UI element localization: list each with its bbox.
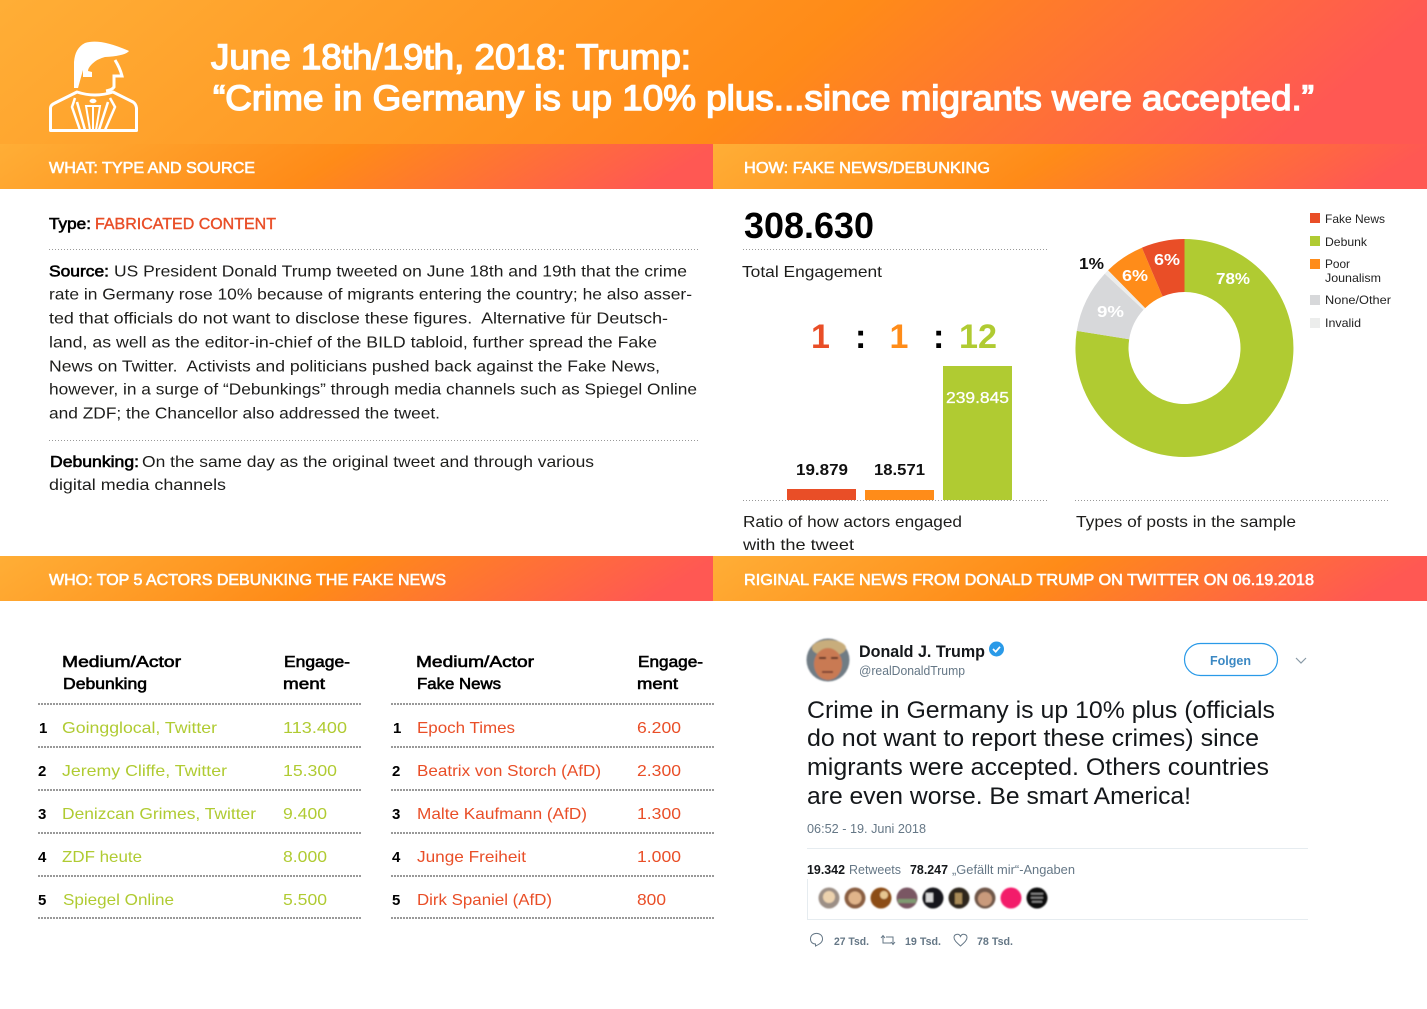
row 1 <box>393 720 681 737</box>
row 4: Junge Freiheit <box>417 849 527 866</box>
ratio numbers: 1 <box>890 318 908 356</box>
account handle: @realDonaldTrump <box>859 663 965 678</box>
row 4 <box>392 849 681 866</box>
donut chart: types of posts: 78% <box>1216 271 1250 288</box>
donut chart: types of posts: 9% <box>1097 304 1124 321</box>
row 4: 1.000 <box>637 849 681 866</box>
row 4: 8.000 <box>283 849 327 866</box>
tweet text: Crime in Germany is up 10% plus (officials <box>807 697 1275 724</box>
tweet stats: 78.247 <box>910 863 948 877</box>
section bar: how <box>713 144 1427 189</box>
panel: total engagement: 308.630 <box>744 205 874 246</box>
legend: Debunk <box>1325 235 1368 249</box>
bar chart: actor ratio: 19.879 <box>796 462 848 479</box>
row 4: 4 <box>392 849 401 866</box>
header banner <box>0 0 1427 144</box>
title <box>211 38 1314 118</box>
source paragraph: ted that officials do not want to disclose these figures. Alternative für Deutsch- <box>49 310 668 328</box>
row 5: 800 <box>637 892 666 909</box>
row 1: Epoch Times <box>417 720 515 737</box>
icon: heart <box>954 934 967 946</box>
account name: Donald J. Trump <box>859 642 985 661</box>
tweet stats: 19.342 <box>807 863 845 877</box>
tweet actions: 19 Tsd. <box>905 936 941 948</box>
legend: Jounalism <box>1325 271 1381 285</box>
legend: None/Other <box>1325 293 1391 307</box>
row 3: Malte Kaufmann (AfD) <box>417 806 587 823</box>
row 5 <box>38 892 327 909</box>
row 5: 5 <box>38 892 46 909</box>
panel: total engagement <box>742 205 1047 281</box>
icon: chevron <box>1296 658 1306 663</box>
caption: ratio <box>742 514 962 554</box>
panel: total engagement: Total Engagement <box>742 264 883 281</box>
row 5: Dirk Spaniel (AfD) <box>417 892 552 909</box>
row 1: 1 <box>39 720 47 737</box>
row 2: 15.300 <box>283 763 337 780</box>
icon: Trump portrait <box>50 42 136 130</box>
donut chart: types of posts: 6% <box>1154 252 1180 269</box>
bar chart: actor ratio <box>742 318 1047 554</box>
section bar: how: HOW: FAKE NEWS/DEBUNKING <box>744 160 990 177</box>
section bar: what: WHAT: TYPE AND SOURCE <box>49 160 255 177</box>
row 2: 2 <box>38 763 46 780</box>
row 3: Denizcan Grimes, Twitter <box>62 806 257 823</box>
type line: FABRICATED CONTENT <box>95 216 276 233</box>
tweet text: do not want to report these crimes) since <box>807 725 1259 752</box>
tweet actions: 78 Tsd. <box>977 936 1013 948</box>
ratio numbers: : <box>933 318 944 356</box>
tweet actions <box>810 933 1013 948</box>
bar chart: actor ratio: 18.571 <box>874 462 925 479</box>
caption: types of posts: Types of posts in the sample <box>1076 514 1296 531</box>
section bar: who: WHO: TOP 5 ACTORS DEBUNKING THE FAKE NEWS <box>49 572 446 589</box>
tweet stats <box>807 863 1075 877</box>
source paragraph: US President Donald Trump tweeted on June 18th and 19th that the crime <box>114 264 687 280</box>
ratio numbers <box>811 318 997 356</box>
table header: Medium/Actor <box>416 654 535 671</box>
row 3 <box>392 806 681 823</box>
source paragraph <box>49 264 697 422</box>
row 2 <box>392 763 681 780</box>
section bar: original <box>713 556 1427 601</box>
table header: Fake News <box>417 676 501 693</box>
row 3: 3 <box>38 806 46 823</box>
table header: Debunking <box>63 676 147 693</box>
row 2: 2.300 <box>637 763 681 780</box>
ratio numbers: : <box>855 318 866 356</box>
row 2: Beatrix von Storch (AfD) <box>417 763 601 780</box>
source paragraph: News on Twitter. Activists and politicians pushed back against the Fake News, <box>49 358 660 376</box>
ratio numbers: 12 <box>959 318 997 356</box>
table header: ment <box>637 676 679 693</box>
row 1: 113.400 <box>283 720 347 737</box>
panel: tweet <box>806 638 1308 948</box>
follow button: Folgen <box>1210 653 1251 668</box>
section bar: who <box>0 556 713 601</box>
table header: Engage- <box>284 654 350 671</box>
row 4 <box>38 849 327 866</box>
row 5: Spiegel Online <box>63 892 174 909</box>
type line: Type: <box>49 216 91 233</box>
tweet stats: „Gefällt mir“-Angaben <box>952 863 1075 877</box>
follow button <box>1184 644 1278 676</box>
donut chart: types of posts: 1% <box>1079 256 1104 273</box>
icon: retweet <box>881 936 895 944</box>
table header: ment <box>283 676 326 693</box>
source paragraph: Source: <box>49 264 109 280</box>
table header <box>416 654 703 693</box>
debunking paragraph: On the same day as the original tweet and through various <box>142 454 594 471</box>
row 2: Jeremy Cliffe, Twitter <box>62 763 228 780</box>
legend: Poor <box>1325 257 1350 271</box>
table header: Engage- <box>638 654 703 671</box>
tweet text: are even worse. Be smart America! <box>807 783 1191 810</box>
section bar: what <box>0 144 713 189</box>
caption: ratio: Ratio of how actors engaged <box>743 514 962 531</box>
row 5: 5 <box>392 892 400 909</box>
tweet text <box>807 697 1275 810</box>
legend: Invalid <box>1325 316 1361 330</box>
table: debunking actors <box>38 654 361 918</box>
source paragraph: rate in Germany rose 10% because of migrants entering the country; he also asser- <box>49 286 692 304</box>
icon: verified badge <box>989 642 1004 656</box>
row 1 <box>39 720 347 737</box>
ratio numbers: 1 <box>811 318 830 356</box>
table: fake news actors <box>391 654 714 918</box>
legend <box>1310 212 1391 330</box>
source paragraph: however, in a surge of “Debunkings” through media channels such as Spiegel Online <box>49 382 697 398</box>
tweet actions: 27 Tsd. <box>834 936 869 948</box>
row 4: 4 <box>38 849 47 866</box>
legend: Fake News <box>1325 212 1385 226</box>
donut chart: types of posts <box>1075 239 1293 457</box>
tweet stats: Retweets <box>849 863 901 877</box>
panel: type and source text <box>49 216 699 494</box>
tweet text: migrants were accepted. Others countries <box>807 754 1269 781</box>
tweet date: 06:52 - 19. Juni 2018 <box>807 822 926 836</box>
source paragraph: land, as well as the editor-in-chief of the BILD tabloid, further spread the Fake <box>49 334 657 352</box>
liker avatars <box>818 888 1048 908</box>
row 5 <box>392 892 666 909</box>
debunking paragraph <box>49 454 594 494</box>
title: “Crime in Germany is up 10% plus...since migrants were accepted.” <box>213 79 1314 118</box>
row 3: 1.300 <box>637 806 681 823</box>
table header <box>62 654 350 693</box>
row 5: 5.500 <box>283 892 327 909</box>
row 3: 9.400 <box>283 806 327 823</box>
caption: ratio: with the tweet <box>742 537 855 554</box>
row 2: 2 <box>392 763 400 780</box>
row 1: Goingglocal, Twitter <box>62 720 218 737</box>
title: June 18th/19th, 2018: Trump: <box>211 38 691 77</box>
bar chart: actor ratio: 239.845 <box>946 390 1009 407</box>
icon: reply <box>810 933 822 946</box>
debunking paragraph: digital media channels <box>49 477 226 494</box>
row 3: 3 <box>392 806 400 823</box>
table header: Medium/Actor <box>62 654 182 671</box>
source paragraph: and ZDF; the Chancellor also addressed the tweet. <box>49 406 440 422</box>
row 1: 6.200 <box>637 720 681 737</box>
row 3 <box>38 806 327 823</box>
section bar: original: RIGINAL FAKE NEWS FROM DONALD TRUMP ON TWITTER ON 06.19.2018 <box>744 572 1314 589</box>
row 1: 1 <box>393 720 401 737</box>
icon: profile photo <box>806 638 850 682</box>
debunking paragraph: Debunking: <box>50 454 139 471</box>
donut chart: types of posts: 6% <box>1122 268 1148 285</box>
row 4: ZDF heute <box>62 849 142 866</box>
row 2 <box>38 763 337 780</box>
